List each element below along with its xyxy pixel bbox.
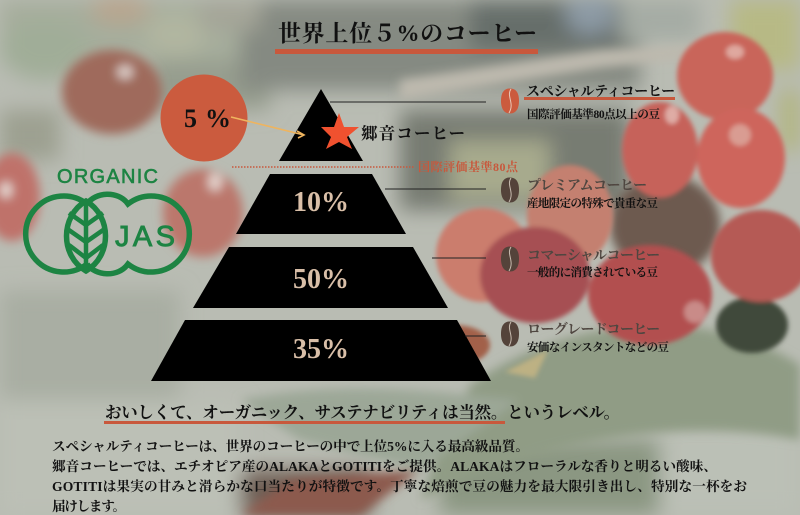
tier: 10% (236, 174, 406, 234)
legend: low grade: 安価なインスタントなどの豆 (527, 340, 670, 354)
legend: premium: 産地限定の特殊で貴重な豆 (527, 196, 658, 210)
5% circle (160, 74, 248, 162)
legend: specialty (501, 85, 675, 121)
logo: organic JAS: JAS (115, 221, 175, 253)
logo: organic JAS (26, 166, 189, 274)
icon: star (321, 113, 359, 149)
body text (52, 438, 747, 514)
logo: organic JAS: ORGANIC (57, 166, 158, 188)
body text: 郷音コーヒーでは、エチオピア産のALAKAとGOTITIをご提供。ALAKAはフローラルな香りと明るい酸味、 (52, 458, 717, 474)
legend: low grade: ローグレードコーヒー (527, 322, 660, 338)
tier: top 5% (279, 89, 363, 161)
body text: スペシャルティコーヒーは、世界のコーヒーの中で上位5%に入る最高級品質。 (52, 438, 529, 454)
body text: 届けします。 (52, 499, 126, 514)
legend: commercial: 一般的に消費されている豆 (527, 265, 658, 279)
arrow: 5% to top tier (231, 117, 304, 138)
threshold line and label: 国際評価基準80点 (418, 159, 519, 174)
legend: premium: プレミアムコーヒー (527, 178, 647, 194)
tier: 35%: 35% (293, 334, 349, 365)
legend: low grade (501, 322, 670, 354)
connector lines (330, 102, 486, 336)
tier: 50%: 50% (293, 264, 349, 295)
body text: GOTITIは果実の甘みと滑らかな口当たりが特徴です。丁寧な焙煎で豆の魅力を最大限引き出し、特別な一杯をお (52, 478, 747, 494)
legend: specialty: 国際評価基準80点以上の豆 (527, 107, 660, 121)
legend: premium (501, 178, 658, 210)
legend: commercial (501, 246, 660, 279)
icon: bean (501, 322, 519, 346)
pyramid (151, 89, 491, 381)
legend: specialty: スペシャルティコーヒー (526, 85, 675, 100)
tier: 10%: 10% (293, 187, 349, 218)
icon: bean (501, 88, 519, 114)
title: 世界上位５%のコーヒー (278, 21, 537, 46)
tagline: おいしくて、オーガニック、サステナビリティは当然。というレベル。 (105, 402, 620, 422)
5% circle: 5% (184, 104, 231, 133)
tier: 50% (193, 247, 448, 308)
icon: bean (501, 246, 519, 272)
tier: 35% (151, 320, 491, 381)
brand label: 郷音コーヒー (361, 124, 465, 143)
legend: commercial: コマーシャルコーヒー (527, 249, 660, 264)
icon: bean (501, 178, 519, 202)
